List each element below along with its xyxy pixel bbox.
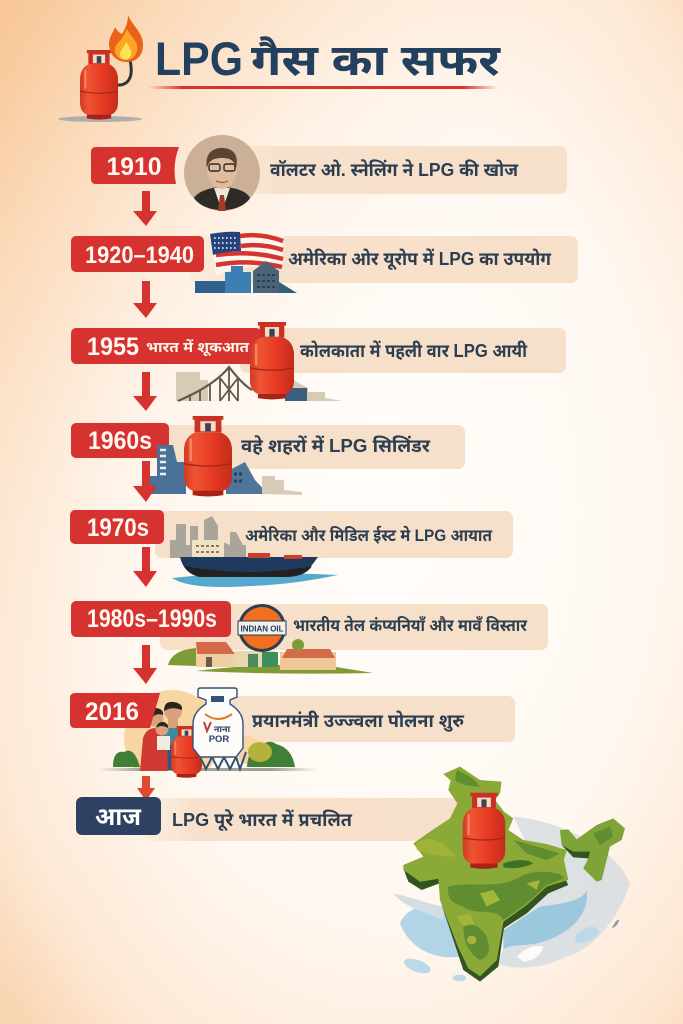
year tag: [71, 601, 231, 637]
year tag: 1920–1940: [85, 242, 194, 269]
timeline row: आज: [76, 797, 465, 841]
panel: [200, 696, 515, 742]
year tag: आज: [95, 803, 142, 831]
icon: city and ship: [155, 516, 338, 587]
icon: white Ujjwala cylinder: POR: [209, 734, 229, 745]
timeline row: 1955: [71, 322, 566, 401]
panel: [160, 604, 548, 650]
year tag: [71, 423, 169, 458]
man: [160, 726, 194, 770]
icon: american flag and buildings: [195, 231, 297, 293]
panel: [145, 798, 465, 841]
title: [148, 32, 501, 89]
timeline row: 1920–1940: [71, 231, 578, 293]
icon: white Ujjwala cylinder: [193, 688, 246, 769]
title: गैस का सफर: [251, 36, 501, 85]
year tag: [71, 328, 261, 364]
icon: gas cylinder: [250, 322, 294, 400]
event text: वॉलटर ओ. स्नेलिंग ने LPG की खोज: [270, 158, 518, 180]
panel: [190, 236, 578, 283]
map depth: [440, 878, 568, 982]
icon: gas cylinder: [171, 726, 202, 778]
event text: भारतीय तेल कंप्यनियाँ और मावँ विस्तार: [293, 615, 527, 635]
year tag: भारत में शूकआत: [146, 339, 250, 357]
icon: gas cylinder with flame: [58, 15, 143, 122]
child: [156, 722, 168, 736]
panel: [240, 328, 566, 373]
water blobs: [393, 817, 630, 981]
event text: कोलकाता में पहली वार LPG आयी: [300, 340, 528, 361]
icon: village: [168, 639, 373, 674]
year tag: 1960s: [88, 427, 152, 455]
arrow: [133, 461, 157, 502]
timeline row: 1980s-1990s: [71, 601, 548, 674]
icon: white Ujjwala cylinder: नाना: [214, 724, 231, 734]
northeast land: [560, 818, 625, 882]
woman: [140, 728, 168, 771]
icon: gas cylinder: [184, 416, 232, 497]
year tag: 2016: [85, 698, 139, 726]
timeline row: 1970s: [70, 510, 513, 587]
icon: city buildings: [150, 445, 302, 495]
India land: [403, 767, 568, 976]
event text: अमेरिका और मिडिल ईस्ट मे LPG आयात: [245, 525, 492, 545]
year tag: [71, 236, 204, 272]
event text: वहे शहरों में LPG सिलिंडर: [241, 434, 431, 456]
icon: Indian Oil logo: INDIAN OIL: [240, 624, 284, 634]
panel: [225, 146, 567, 194]
map of India with cylinder: [393, 767, 630, 982]
timeline row: 1910: [91, 135, 567, 211]
arrow: [133, 372, 157, 411]
year tag: [91, 147, 179, 184]
year tag: 1970s: [87, 514, 149, 542]
arrow: [137, 776, 155, 801]
year tag: 1980s–1990s: [87, 605, 217, 633]
portrait: [184, 135, 260, 211]
panel: [160, 425, 465, 469]
arrow: [133, 645, 157, 684]
timeline row: 1960s: [71, 416, 465, 497]
title: LPG: [155, 32, 243, 85]
arrow: [133, 191, 157, 226]
arrow: [133, 281, 157, 318]
panel: [155, 511, 513, 558]
year tag: 1955: [87, 333, 139, 361]
timeline row: 2016: [70, 688, 515, 786]
year tag: [76, 797, 161, 835]
year tag: [70, 510, 164, 544]
arrow: [133, 547, 157, 587]
icon: Indian Oil logo: [238, 604, 286, 652]
icon: Kolkata bridge skyline: [176, 367, 342, 401]
year tag: 1910: [106, 153, 162, 181]
icon: family illustration: [102, 690, 312, 778]
event text: LPG पूरे भारत में प्रचलित: [172, 808, 353, 832]
icon: gas cylinder: [463, 793, 505, 869]
year tag: [70, 693, 160, 728]
event text: अमेरिका ओर यूरोप में LPG का उपयोग: [288, 247, 552, 271]
event text: प्रयानमंत्री उज्ज्वला पोलना शुरु: [252, 710, 465, 733]
